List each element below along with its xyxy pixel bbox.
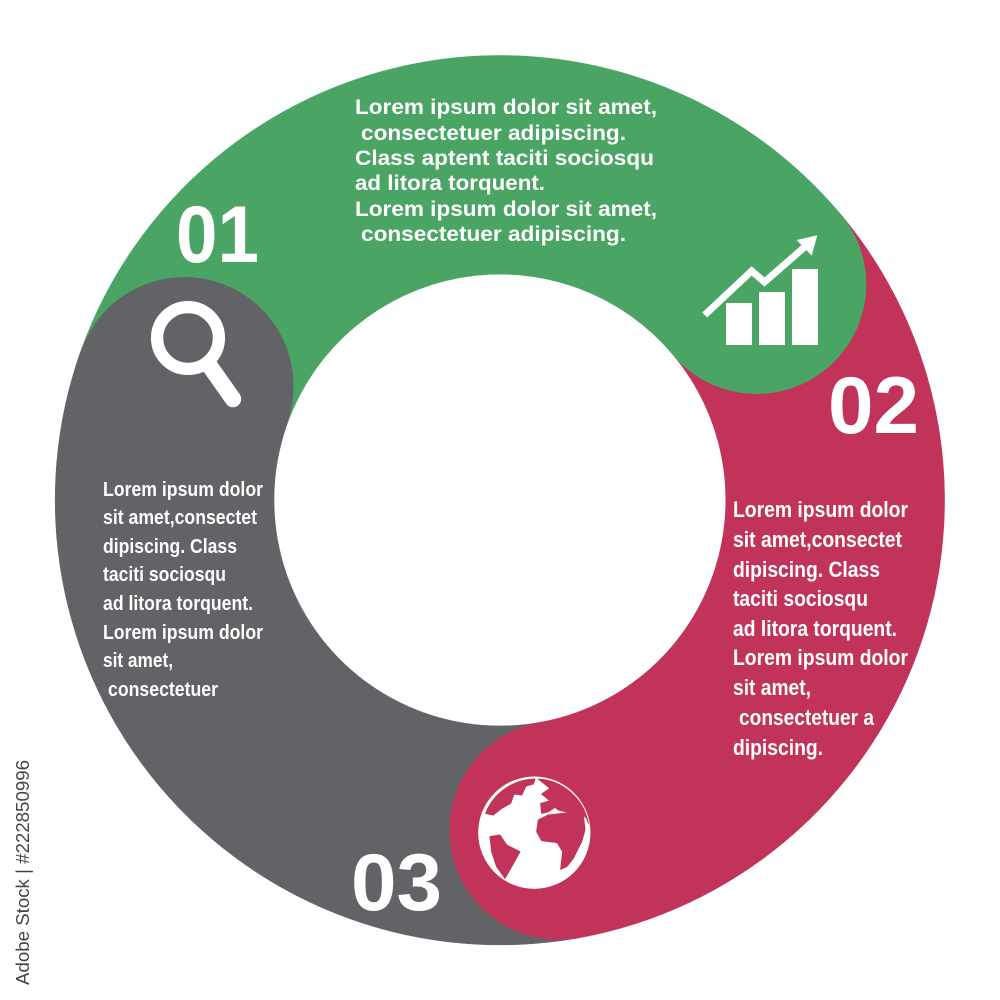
text: gray panel body: sit amet,consectet: [103, 507, 257, 529]
panel: red segment 02: [450, 214, 945, 940]
text: gray panel body: ad litora torquent.: [103, 593, 253, 615]
icon: globe: [478, 776, 590, 889]
text: green panel body: Lorem ipsum dolor sit amet,: [355, 96, 657, 119]
text: red panel body: ad litora torquent.: [733, 616, 897, 641]
text: gray panel body: Lorem ipsum dolor: [103, 622, 263, 644]
text: red panel body: Lorem ipsum dolor: [733, 497, 908, 522]
green ring shape: [82, 55, 866, 423]
side credit text: Adobe Stock | #222850996: [13, 760, 33, 985]
number 03: 03: [351, 838, 442, 928]
text: gray panel body: consectetuer: [108, 679, 218, 701]
text: red panel body: Lorem ipsum dolor: [733, 645, 908, 670]
text: red panel body: sit amet,: [733, 675, 811, 700]
text: gray panel body: taciti sociosqu: [103, 564, 226, 586]
panel: green segment 01: [82, 55, 866, 423]
icon: magnifying glass: [157, 307, 233, 399]
icon: rising bar chart: [705, 235, 818, 345]
text: green panel body: consectetuer adipiscing.: [361, 223, 626, 246]
text: red panel body: taciti sociosqu: [733, 586, 868, 611]
text: gray panel body: dipiscing. Class: [103, 536, 237, 558]
text: gray panel body: [103, 479, 263, 701]
text: red panel body: dipiscing.: [733, 735, 823, 760]
text: green panel body: Lorem ipsum dolor sit amet,: [355, 198, 657, 221]
text: gray panel body: Lorem ipsum dolor: [103, 479, 263, 501]
gray ring shape: [55, 277, 578, 945]
red ring shape: [450, 214, 945, 940]
text: gray panel body: sit amet,: [103, 650, 173, 672]
number 01: 01: [176, 190, 259, 280]
text: red panel body: dipiscing. Class: [733, 557, 880, 582]
text: red panel body: [733, 497, 908, 760]
text: green panel body: ad litora torquent.: [355, 172, 545, 195]
text: green panel body: Class aptent taciti sociosqu: [355, 147, 654, 170]
panel: gray segment 03: [55, 277, 578, 945]
text: red panel body: sit amet,consectet: [733, 527, 903, 552]
text: green panel body: consectetuer adipiscing.: [361, 122, 626, 145]
number 02: 02: [828, 361, 919, 451]
text: red panel body: consectetuer a: [739, 705, 875, 730]
text: green panel body: [355, 96, 657, 246]
